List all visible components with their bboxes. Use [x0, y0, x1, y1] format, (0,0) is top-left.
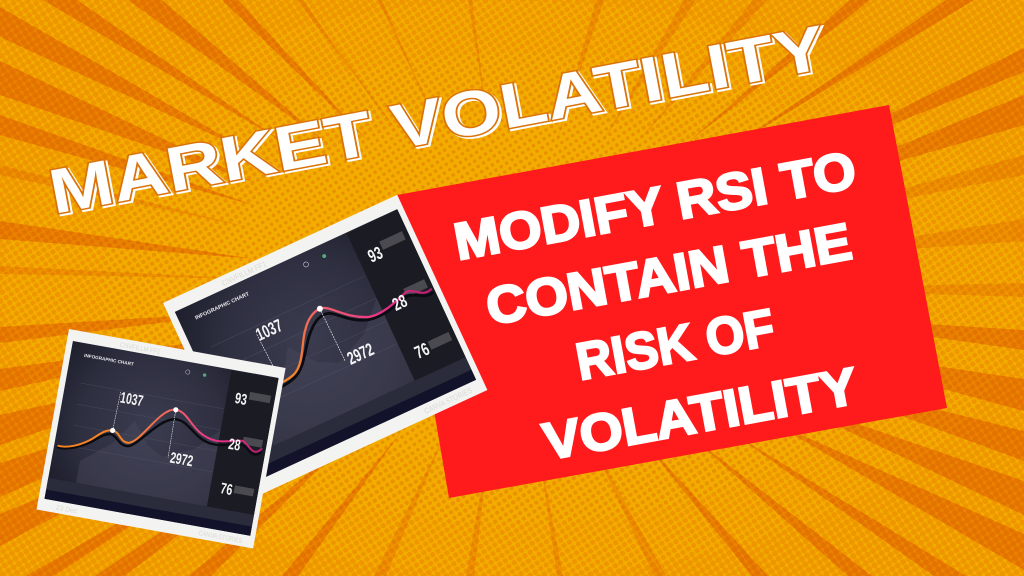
value labels: 2972	[344, 339, 377, 369]
value labels: 1037	[119, 389, 144, 410]
title: market volatility: MARKET VOLATILITY	[44, 13, 831, 228]
frame captions: CNVFILLM FF1	[221, 259, 268, 288]
value labels: 76	[219, 480, 234, 499]
value labels: 28	[389, 291, 410, 315]
frame captions: CANVA STORIES	[198, 530, 243, 545]
panel: front infographic chart card	[37, 329, 286, 548]
frame captions: CNVFILLM FF1	[119, 342, 161, 356]
headline text: RISK OF	[572, 299, 779, 392]
title: market volatility: MARKET VOLATILITY	[46, 14, 833, 229]
chart title: INFOGRAPHIC CHART	[84, 353, 134, 367]
headline text	[450, 141, 862, 472]
line chart curve	[228, 260, 443, 403]
frame captions	[221, 203, 474, 470]
frame captions	[55, 336, 274, 545]
value labels: 1037	[253, 315, 286, 345]
value labels: 93	[365, 242, 386, 267]
headline text: CONTAIN THE	[482, 213, 856, 337]
headline text: MODIFY RSI TO	[450, 141, 860, 272]
frame captions: 23 Dec	[55, 505, 78, 515]
value labels: 76	[411, 339, 432, 363]
value labels: 93	[234, 390, 248, 409]
frame captions: CANVA STORIES	[423, 386, 474, 416]
value labels	[243, 242, 432, 420]
value labels: 2972	[169, 450, 194, 470]
value labels	[106, 370, 250, 499]
panel: red headline banner	[397, 105, 947, 498]
headline text: VOLATILITY	[539, 357, 862, 472]
chart title: INFOGRAPHIC CHART	[194, 291, 251, 321]
value labels: 28	[227, 436, 242, 455]
panel: rear infographic chart card	[163, 195, 487, 498]
line chart curve	[58, 383, 267, 483]
